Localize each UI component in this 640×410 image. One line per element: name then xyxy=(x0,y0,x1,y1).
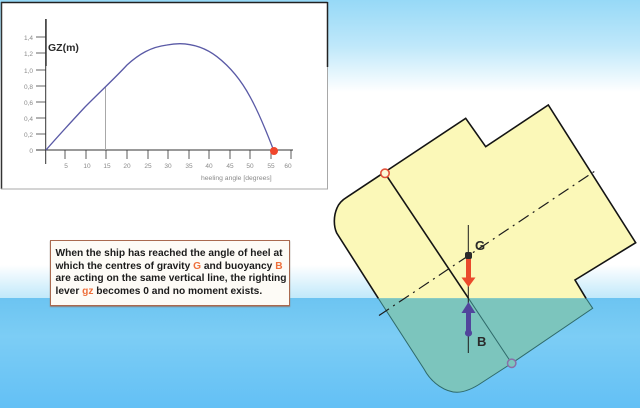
y axis labels: 0,4 xyxy=(24,116,33,123)
callout: explanation text: When the ship has reached the angle of heel at xyxy=(56,248,283,259)
callout: explanation text xyxy=(50,240,290,306)
x axis labels: 60 xyxy=(284,163,292,170)
x axis title: heeling angle [degrees] xyxy=(201,175,272,182)
x axis labels: 50 xyxy=(246,163,254,170)
ship above water xyxy=(334,105,636,298)
callout: explanation text: lever gz becomes 0 and no moment exists. xyxy=(56,286,262,297)
centre line of ship xyxy=(385,173,468,298)
vertical line through G and B xyxy=(467,225,469,353)
blue buoyancy arrow xyxy=(462,302,476,337)
label G: G xyxy=(475,238,485,253)
dash-dot deck axis xyxy=(379,169,598,316)
y axis labels: 1,4 xyxy=(24,35,33,42)
x axis labels: 5 xyxy=(64,163,68,170)
callout: explanation text: which the centres of gravity G and buoyancy B xyxy=(56,261,283,272)
x axis labels: 20 xyxy=(123,163,131,170)
x axis labels xyxy=(64,163,292,170)
x axis labels: 40 xyxy=(205,163,213,170)
purple keel marker xyxy=(508,359,516,367)
ship cross-section xyxy=(334,105,636,392)
x axis labels: 35 xyxy=(185,163,193,170)
red vanishing stability point xyxy=(270,147,278,155)
label B: B xyxy=(477,334,486,349)
x axis labels: 10 xyxy=(83,163,91,170)
x axis labels: 25 xyxy=(144,163,152,170)
ship outline above water xyxy=(334,105,636,298)
y axis labels: 1,0 xyxy=(24,68,33,75)
ship below water xyxy=(378,298,593,392)
y axis labels: 0 xyxy=(29,148,33,155)
red gravity arrow xyxy=(462,256,476,287)
marker line at 15 degrees xyxy=(104,87,106,150)
y axis title: GZ(m) xyxy=(48,42,79,54)
y axis labels: 0,8 xyxy=(24,84,33,91)
y axis labels xyxy=(24,35,33,155)
x axis labels: 45 xyxy=(226,163,234,170)
ship outline below water xyxy=(378,298,593,392)
red deck marker xyxy=(381,169,389,178)
centre of gravity dot xyxy=(465,252,472,259)
y axis labels: 0,2 xyxy=(24,132,33,139)
GZ curve xyxy=(46,44,274,150)
y axis labels: 1,2 xyxy=(24,51,33,58)
callout: explanation text: are acting on the same vertical line, the righting xyxy=(56,273,286,284)
x axis labels: 30 xyxy=(164,163,172,170)
panel: GZ chart xyxy=(1,2,328,189)
y axis labels: 0,6 xyxy=(24,100,33,107)
chart axes xyxy=(36,19,293,164)
x axis labels: 15 xyxy=(103,163,111,170)
x axis labels: 55 xyxy=(267,163,275,170)
